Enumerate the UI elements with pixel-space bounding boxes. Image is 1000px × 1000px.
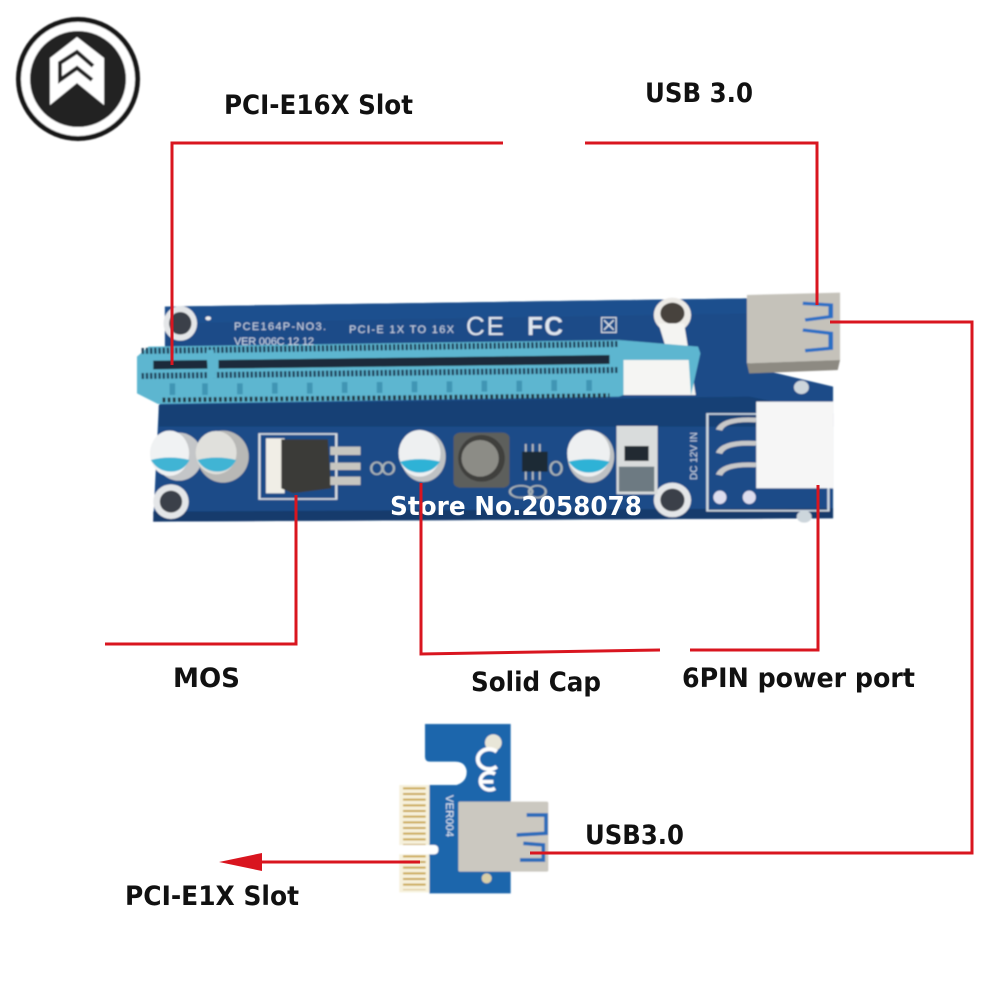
PCI-E slot [137,340,700,404]
label: MOS: MOS [173,663,240,694]
PCB silkscreen text: PCE164P-NO3. [234,321,326,333]
solid capacitors [150,430,614,483]
mounting holes [164,306,197,341]
label: PCI-E1X Slot: PCI-E1X Slot [125,881,299,912]
label: USB 3.0 top: USB 3.0 [645,78,753,109]
label: USB3.0 card: USB3.0 [585,820,684,851]
leader: MOS [105,495,296,644]
label: Solid Cap: Solid Cap [471,667,601,698]
label: 6PIN power port: 6PIN power port [682,663,915,694]
MOS transistor [259,434,360,499]
PCB silkscreen text: DC 12V IN [689,432,700,480]
PCB [137,293,840,523]
PCB silkscreen text: FC [527,311,563,341]
store watermark: Store No.2058078 [390,492,642,522]
leader: USB link between ports [530,322,972,853]
leader: Solid Cap [421,483,660,654]
USB 3.0 port [747,293,840,373]
leader: PCI-E16X slot [172,143,503,365]
PCB silkscreen text: PCI-E 1X TO 16X [349,324,455,336]
PCB silkscreen text [234,311,700,480]
card PCB [420,724,511,893]
PCB silkscreen text: CE [466,311,504,341]
card silkscreen: VER004 [443,795,455,837]
logo [16,17,140,141]
PCB silkscreen text: ☒ [599,314,619,339]
PCI-E1X card photo [397,724,548,893]
arrow: PCI-E1X [219,853,420,871]
leader: 6PIN [690,485,818,650]
riser board photo [137,293,840,523]
6PIN power connector [707,402,833,511]
gold fingers [397,785,438,892]
leader: USB 3.0 [585,143,817,305]
label: PCI-E16X Slot: PCI-E16X Slot [224,90,413,121]
PCB silkscreen text: VER 006C 12 12 [234,336,314,348]
latch [624,323,696,395]
coils and inductor [371,426,658,498]
USB port [458,802,548,872]
